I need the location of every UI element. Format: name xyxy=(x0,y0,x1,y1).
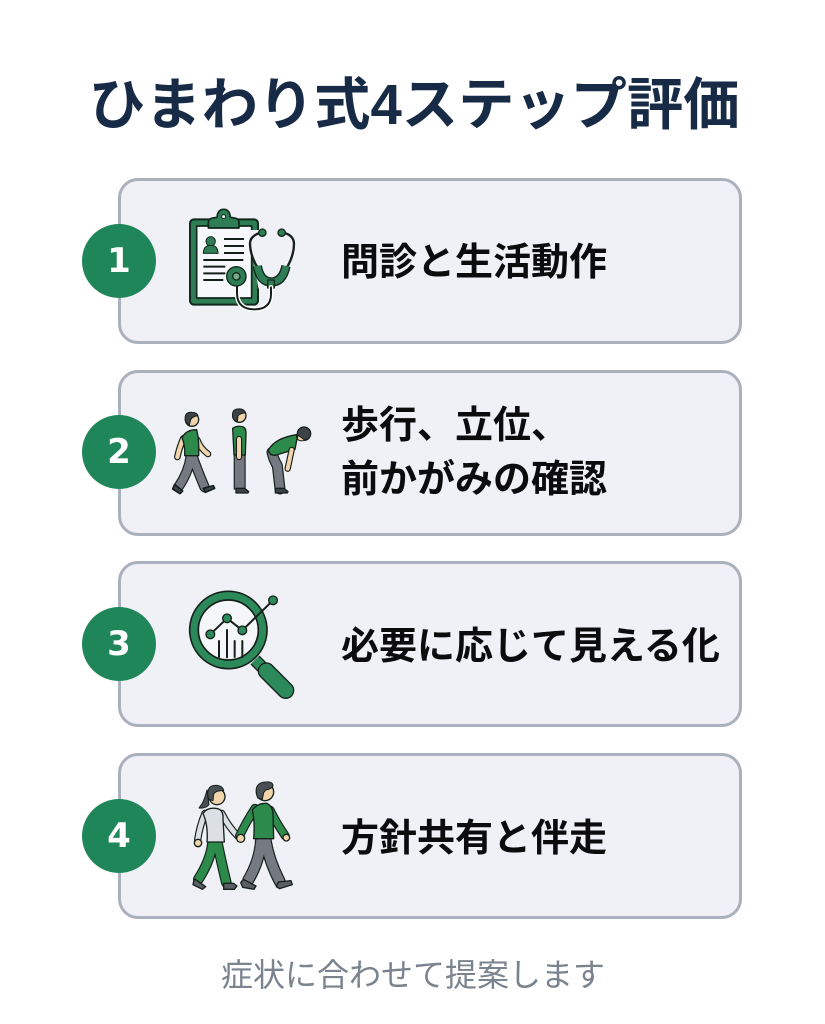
standing xyxy=(222,455,258,490)
step 1 text: 問診と生活動作 xyxy=(341,242,607,284)
title: ひまわり式4ステップ評価 xyxy=(89,73,740,136)
step 3 text: 必要に応じて見える化 xyxy=(341,626,720,668)
icon: walking, standing and bending figures xyxy=(172,408,312,494)
panel: step 1 xyxy=(82,178,742,344)
panel: step 4 xyxy=(82,753,742,919)
icon: two people walking hand in hand xyxy=(192,781,293,890)
man xyxy=(248,841,280,881)
walking xyxy=(177,438,183,457)
step 4 text: 方針共有と伴走 xyxy=(341,818,607,860)
step 3 number badge: 3 xyxy=(107,624,131,664)
bending xyxy=(272,452,280,489)
step 1 number badge xyxy=(82,224,156,298)
step 1 number badge: 1 xyxy=(107,241,131,281)
step 4 number badge xyxy=(82,799,156,873)
panel: step 3 xyxy=(82,561,742,727)
step 2 number badge: 2 xyxy=(107,432,131,472)
step 2 text: 前かがみの確認 xyxy=(341,459,607,501)
step 3 number badge xyxy=(82,607,156,681)
step 2 text xyxy=(341,405,607,501)
woman xyxy=(198,844,226,883)
footer note: 症状に合わせて提案します xyxy=(221,957,605,993)
step 2 text: 歩行、立位、 xyxy=(341,405,569,447)
step 2 number badge xyxy=(82,415,156,489)
panel: step 2 xyxy=(82,370,742,536)
icon: magnifying glass with chart xyxy=(188,590,294,699)
icon: clipboard and stethoscope xyxy=(189,208,296,312)
step 4 number badge: 4 xyxy=(107,816,131,856)
